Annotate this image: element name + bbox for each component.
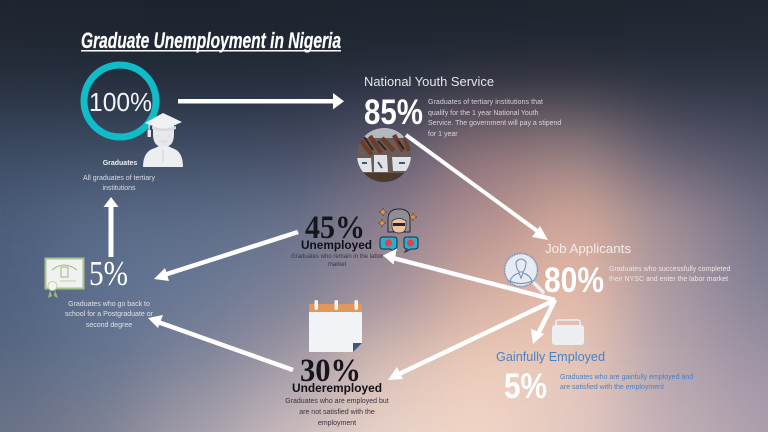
panel: underemployed xyxy=(285,300,389,427)
description: job applicants: Graduates who successfully completed xyxy=(609,266,730,273)
panel: job applicants xyxy=(504,241,730,300)
icon: certificate xyxy=(46,258,84,298)
heading: job applicants: Job Applicants xyxy=(545,241,632,256)
description: underemployed: Graduates who are employed but xyxy=(285,398,389,405)
heading: graduates: Graduates xyxy=(103,160,137,167)
description: gainfully employed: are satisfied with the employment xyxy=(560,384,664,391)
arrow: job applicants to underemployed xyxy=(388,300,555,380)
description: graduates: institutions xyxy=(102,185,136,192)
heading: national youth service: National Youth Service xyxy=(364,74,494,89)
icon: magnifier with applicant xyxy=(504,254,543,292)
arrow: youth service to job applicants xyxy=(406,135,548,240)
arrow: underemployed to postgraduate xyxy=(148,315,293,370)
description: graduates: All graduates of tertiary xyxy=(83,175,155,182)
panel: gainfully employed xyxy=(496,320,693,406)
description: underemployed xyxy=(285,398,389,427)
description: postgraduate: Graduates who go back to xyxy=(68,301,150,308)
icon: briefcase xyxy=(552,320,584,345)
title: Graduate Unemployment in Nigeria xyxy=(81,28,341,53)
description: postgraduate: school for a Postgraduate or xyxy=(65,311,154,318)
description: job applicants xyxy=(609,266,730,283)
stat: 80%: 80% xyxy=(544,261,604,300)
stat: 30%: 30% xyxy=(300,353,361,389)
icon: calendar xyxy=(309,300,362,352)
arrow: postgraduate to graduates xyxy=(104,197,118,257)
arrow: graduates to youth service xyxy=(178,93,344,109)
arrow: job applicants to gainfully employed xyxy=(531,300,555,344)
description: postgraduate xyxy=(65,301,154,329)
photo: youth corps members xyxy=(357,128,411,182)
heading: underemployed: Underemployed xyxy=(292,381,382,395)
description: youth service: for 1 year xyxy=(428,131,458,138)
description: youth service xyxy=(428,99,561,138)
panel: graduates xyxy=(83,65,183,192)
description: unemployed: market xyxy=(328,262,346,268)
description: youth service: Graduates of tertiary institutions that xyxy=(428,99,543,106)
description: job applicants: their NYSC and enter the labor market xyxy=(609,276,728,283)
stat: 45%: 45% xyxy=(305,210,365,246)
progress ring xyxy=(84,65,156,137)
icon: graduate xyxy=(143,113,183,167)
arrow: unemployed to postgraduate xyxy=(154,232,298,281)
stat: 5%: 5% xyxy=(504,367,547,406)
arrow: job applicants to unemployed xyxy=(383,248,555,300)
description: unemployed: Graduates who remain in the labor xyxy=(291,254,383,260)
panel: unemployed xyxy=(291,208,418,268)
heading: gainfully employed: Gainfully Employed xyxy=(496,349,605,364)
description: underemployed: are not satisfied with the xyxy=(299,409,375,416)
description: unemployed xyxy=(291,254,383,268)
description: gainfully employed: Graduates who are gainfully employed and xyxy=(560,374,693,381)
description: graduates xyxy=(83,175,155,192)
description: youth service: Service. The government will pay a stipend xyxy=(428,120,561,127)
heading: unemployed: Unemployed xyxy=(301,238,372,252)
stat: 5%: 5% xyxy=(89,254,128,293)
stat: 85%: 85% xyxy=(364,93,423,132)
description: underemployed: employment xyxy=(318,420,356,427)
stat: 100%: 100% xyxy=(89,87,152,117)
panel: national youth service xyxy=(357,74,561,182)
panel: postgraduate xyxy=(46,254,154,329)
description: youth service: qualify for the 1 year National Youth xyxy=(428,110,539,117)
description: gainfully employed xyxy=(560,374,693,391)
icon: woman with hearts xyxy=(378,208,418,252)
description: postgraduate: second degree xyxy=(86,322,132,329)
